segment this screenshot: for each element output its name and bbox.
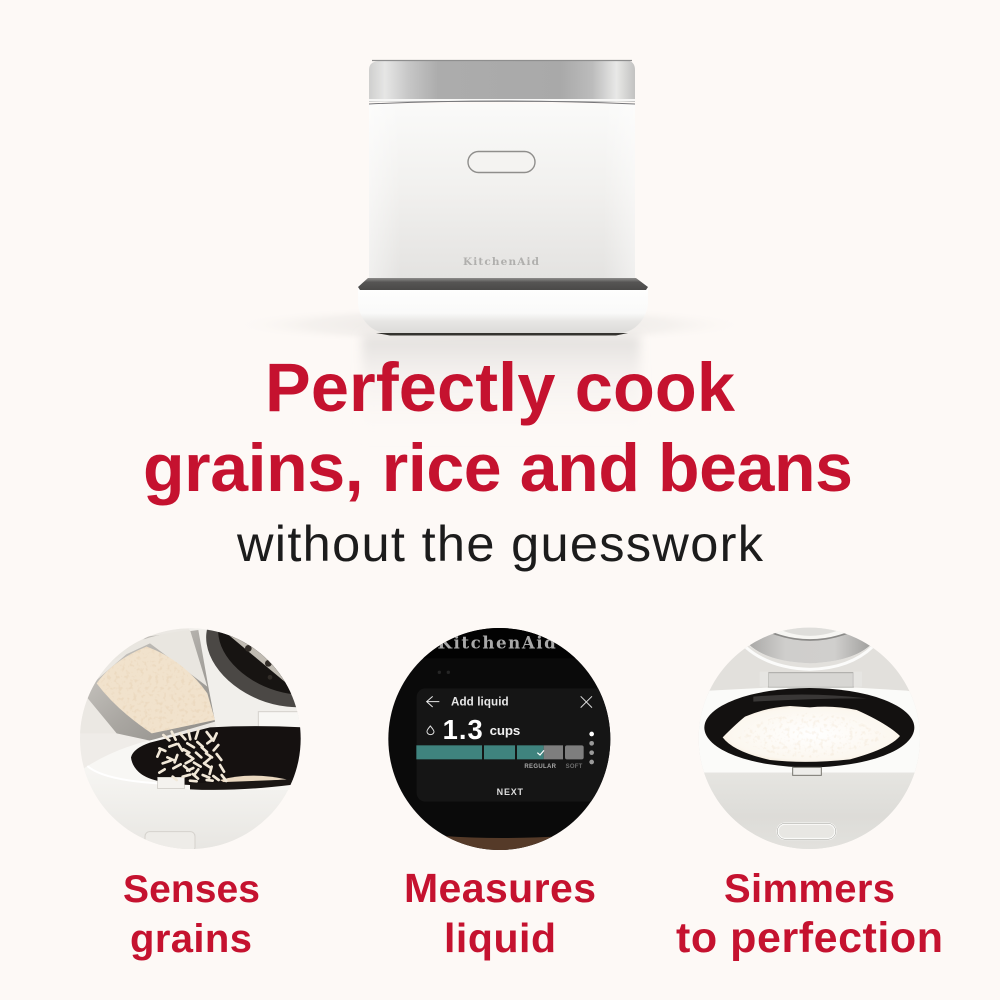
front button — [778, 824, 835, 839]
scoop — [85, 630, 215, 741]
pot — [704, 688, 914, 767]
photo: touch display: NEXT — [497, 787, 523, 797]
label: Simmers to perfection — [676, 867, 943, 962]
falling grains — [157, 730, 226, 781]
photo: touch display: cups — [490, 723, 520, 738]
photo: touch display: SOFT — [566, 764, 583, 770]
open lid — [750, 631, 870, 652]
heading line 2: grains, rice and beans — [143, 430, 853, 506]
photo: touch display: KitchenAid — [437, 633, 556, 653]
panel: simmers to perfection — [676, 620, 943, 962]
heading line 1: Perfectly cook — [265, 349, 736, 426]
liquid gauge — [416, 745, 584, 759]
photo: touch display: 1.3 — [443, 714, 483, 745]
label: Measures liquid: liquid — [444, 915, 556, 961]
page dots — [589, 732, 594, 764]
subheading: without the guesswork — [236, 515, 764, 572]
photo: touch display — [388, 628, 610, 850]
close icon — [581, 696, 592, 708]
label: Senses grains — [123, 868, 260, 961]
panel: senses grains — [80, 628, 301, 960]
cooker base tray — [358, 278, 648, 336]
label: Measures liquid — [404, 865, 596, 961]
panel: measures liquid — [380, 620, 620, 961]
back arrow — [427, 696, 439, 707]
cooker white body — [369, 104, 635, 278]
cooker handle button — [468, 152, 535, 172]
lower body — [84, 767, 86, 774]
hinge — [768, 673, 853, 687]
white rim — [690, 688, 930, 773]
drop icon — [427, 726, 434, 735]
product: rice cooker — [358, 60, 648, 336]
heading — [143, 349, 853, 506]
pot — [89, 736, 290, 790]
KitchenAid logo: KitchenAid — [463, 256, 540, 268]
photo: touch display: Add liquid — [451, 696, 509, 709]
wood counter — [446, 836, 552, 850]
photo: cooked rice in pot — [704, 628, 914, 849]
label: Senses grains: Senses — [123, 868, 260, 911]
label: Simmers to perfection: Simmers — [724, 867, 895, 911]
cooker steel lid — [369, 60, 635, 104]
label: Simmers to perfection: to perfection — [676, 914, 943, 962]
label: Measures liquid: Measures — [404, 865, 596, 911]
photo: touch display: REGULAR — [524, 764, 557, 770]
label: Senses grains: grains — [130, 917, 252, 961]
photo: rice poured into pot — [80, 628, 301, 849]
lower body — [725, 809, 894, 828]
floor shadow and reflection — [230, 305, 750, 441]
